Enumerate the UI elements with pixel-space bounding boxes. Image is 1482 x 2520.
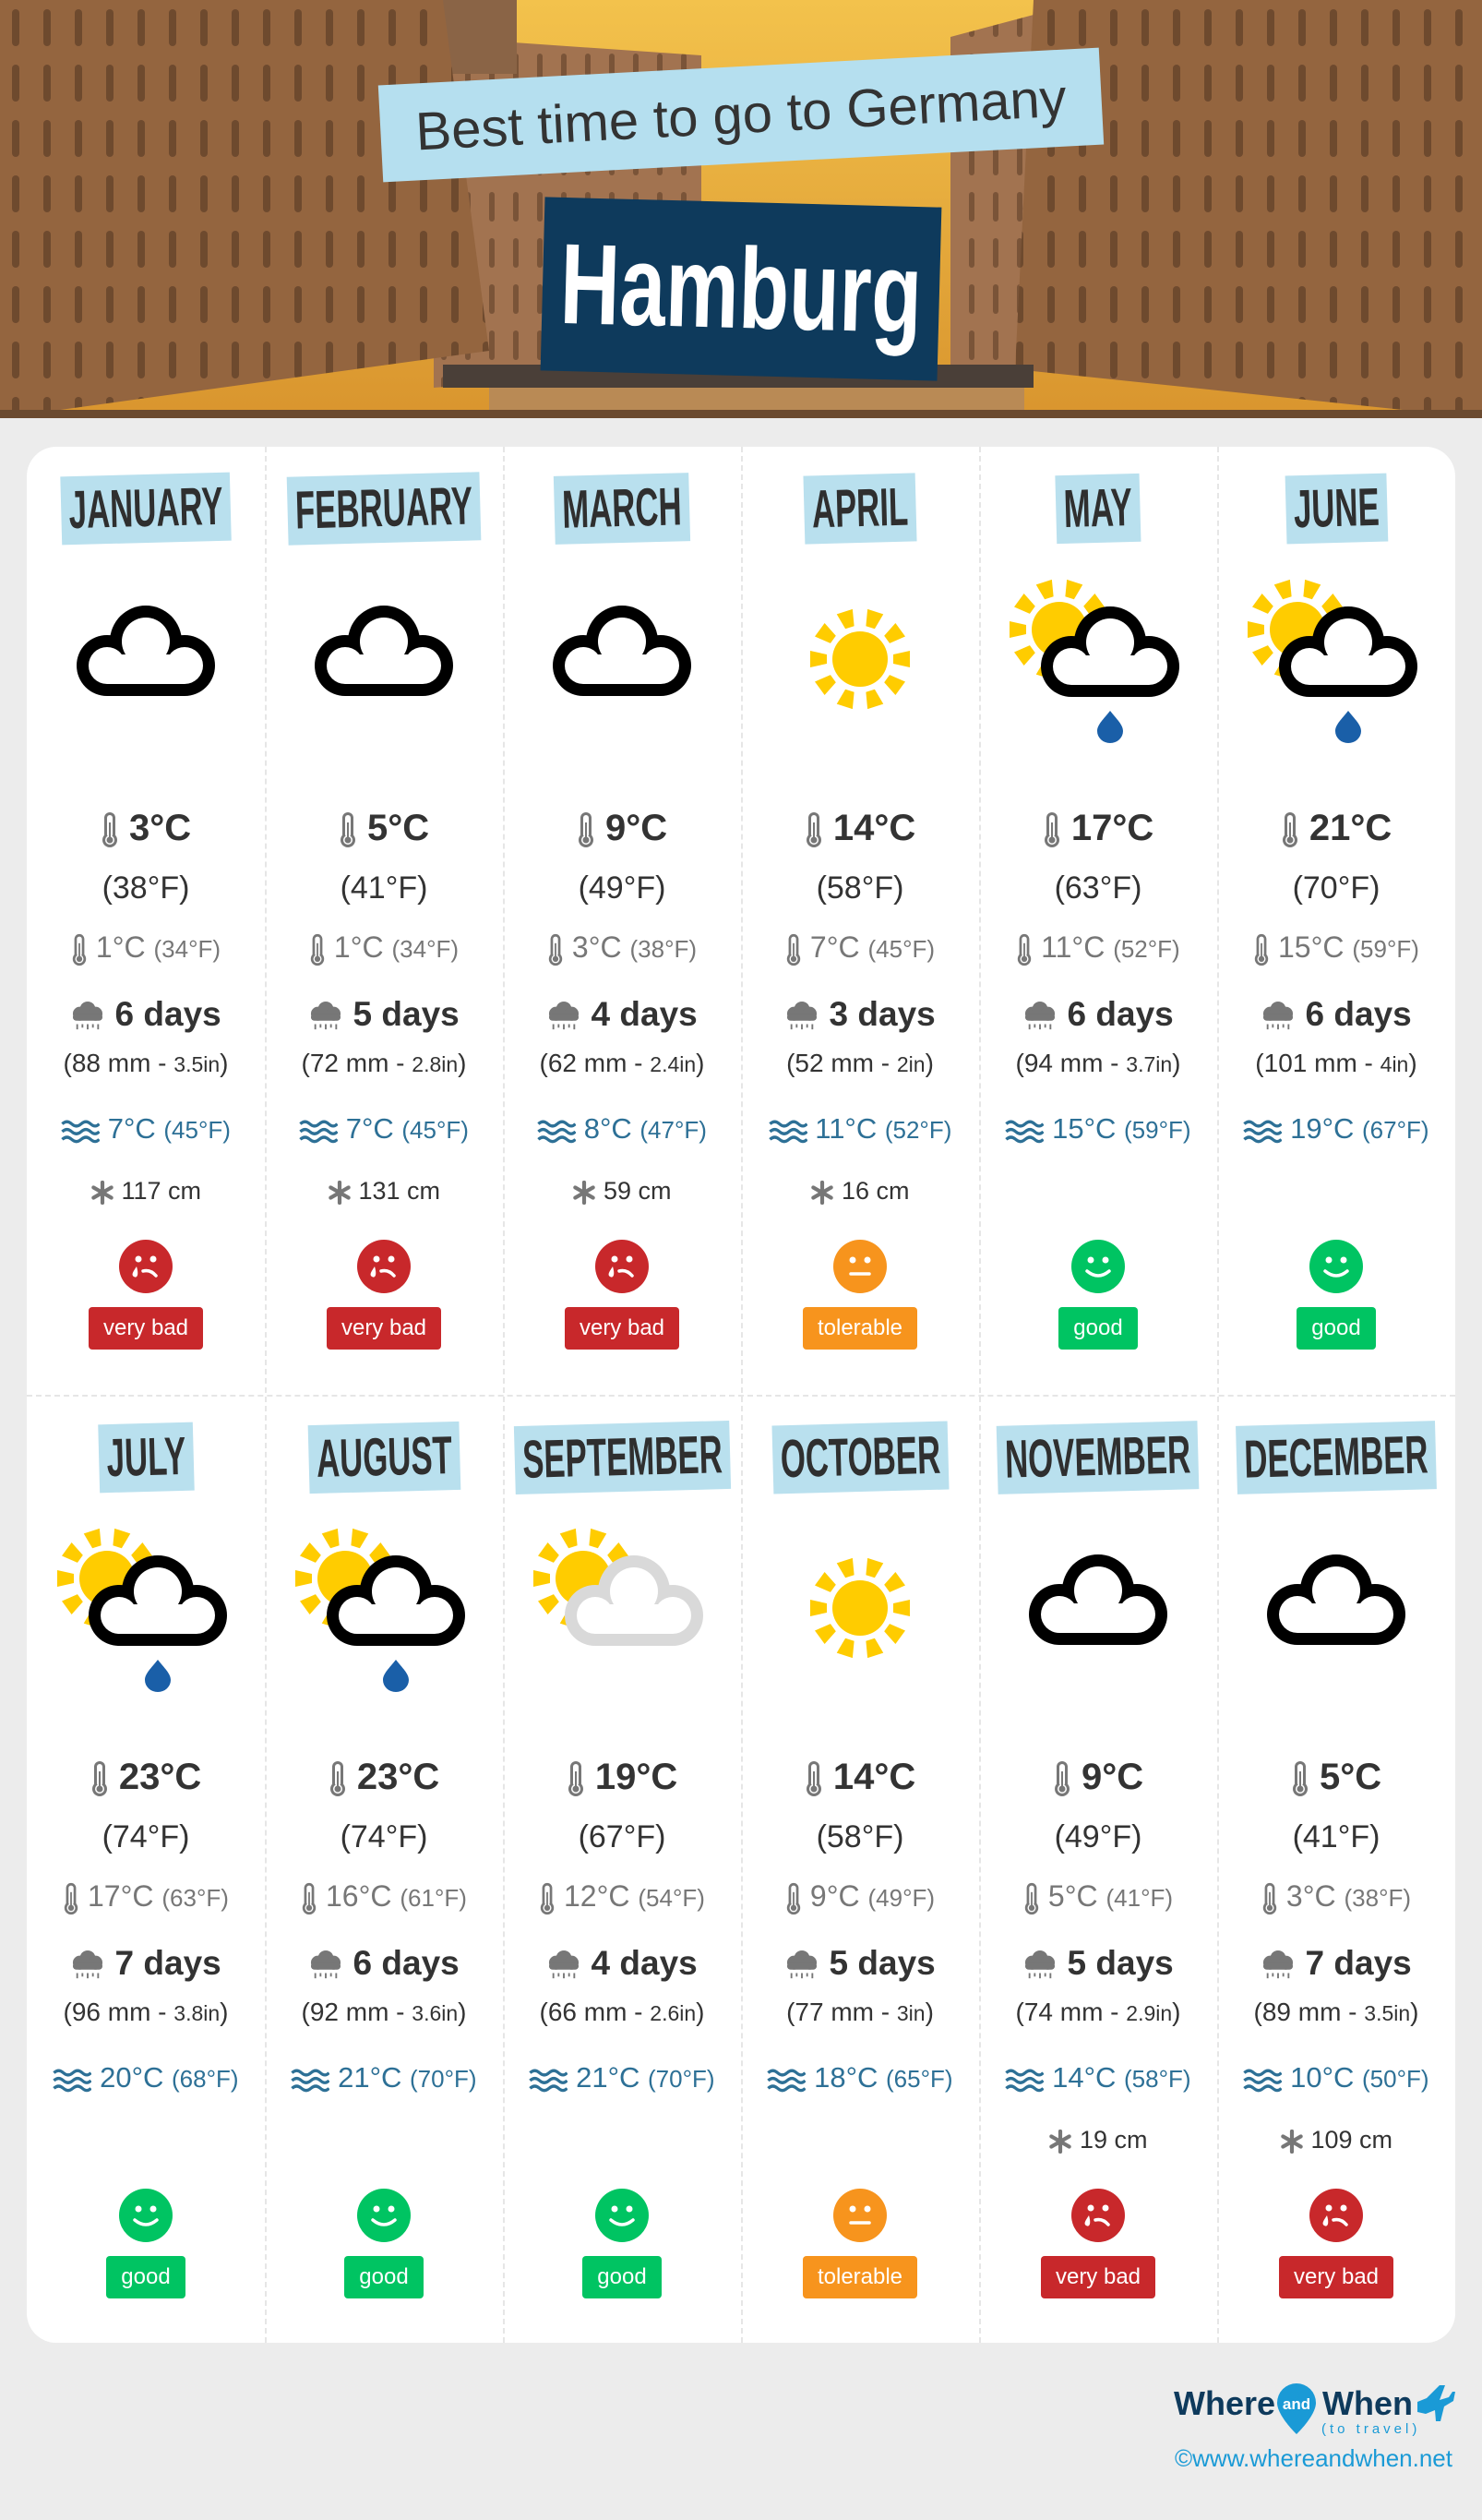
panel: September	[503, 1396, 741, 2343]
rain days: 7 days	[1306, 1944, 1412, 1982]
rain days	[979, 1940, 1217, 1986]
low temperature	[265, 1876, 503, 1916]
panel: March: (62 mm - 2.4in)	[539, 1049, 704, 1077]
sea temperature	[503, 2058, 741, 2098]
rating face	[1217, 2188, 1455, 2243]
sea temperature	[27, 2058, 265, 2098]
rating badge: very bad	[341, 1315, 426, 1340]
footer logo: Where and When: and	[1283, 2395, 1310, 2413]
sea temperature	[1217, 1109, 1455, 1149]
temperature: 5°C	[367, 808, 429, 848]
panel: November	[979, 1396, 1217, 2343]
rain days: 6 days	[353, 1944, 460, 1982]
footer logo: Where and When: (to travel)	[1321, 2421, 1420, 2437]
temperature: 19°C	[595, 1757, 677, 1797]
sea temperature: 21°C (70°F)	[576, 2061, 714, 2094]
footer logo: Where and When: Where	[1174, 2384, 1275, 2422]
rating face	[979, 2188, 1217, 2243]
snow	[573, 1177, 672, 1205]
panel: October: (77 mm - 3in)	[786, 1998, 934, 2026]
month label: APRIL	[811, 477, 909, 539]
rating face	[357, 1240, 411, 1293]
rating badge: good	[597, 2264, 647, 2289]
panel: October: (58°F)	[817, 1819, 903, 1854]
temperature: 5°C	[1320, 1757, 1381, 1797]
month label: JULY	[105, 1426, 186, 1488]
rating face	[265, 2188, 503, 2243]
low temperature	[979, 927, 1217, 967]
rating badge: very bad	[103, 1315, 188, 1340]
temperature: 23°C	[119, 1757, 201, 1797]
low temperature	[27, 1876, 265, 1916]
rating badge: tolerable	[818, 1315, 902, 1340]
sea temperature: 15°C (59°F)	[1052, 1112, 1190, 1145]
rating face	[741, 2188, 979, 2243]
snow: 131 cm	[358, 1177, 440, 1205]
low temperature	[1217, 1876, 1455, 1916]
rain days	[503, 1940, 741, 1986]
rating badge: good	[1073, 1315, 1123, 1340]
low temperature: 7°C (45°F)	[810, 930, 935, 964]
icon: cloud	[1217, 1516, 1455, 1700]
header photo: Hamburg warehouse district	[0, 0, 1482, 418]
main card panel	[27, 447, 1455, 2343]
month label: OCTOBER	[779, 1425, 941, 1489]
low temperature: 12°C (54°F)	[564, 1879, 705, 1913]
temperature	[341, 808, 429, 848]
low temperature: 1°C (34°F)	[334, 930, 459, 964]
month label: SEPTEMBER	[521, 1424, 723, 1490]
rating face	[503, 2188, 741, 2243]
panel: January: (38°F)	[102, 870, 189, 906]
sea temperature: 11°C (52°F)	[815, 1112, 951, 1145]
temperature: 23°C	[357, 1757, 439, 1797]
low temperature: 11°C (52°F)	[1041, 930, 1180, 964]
panel: May: (94 mm - 3.7in)	[1015, 1049, 1180, 1077]
rain days: 5 days	[353, 995, 460, 1033]
title banner: Best time to go to Germany	[378, 48, 1104, 182]
temperature: 9°C	[1082, 1757, 1143, 1797]
low temperature: 1°C (34°F)	[96, 930, 221, 964]
rain days	[979, 991, 1217, 1038]
month label: DECEMBER	[1244, 1424, 1428, 1490]
rain days	[27, 1940, 265, 1986]
month label: JUNE	[1293, 477, 1380, 539]
icon: cloud	[77, 606, 215, 696]
rating face	[833, 1240, 887, 1293]
low temperature: 17°C (63°F)	[88, 1879, 229, 1913]
panel: December: (41°F)	[1293, 1819, 1380, 1854]
icon: cloud	[315, 606, 453, 696]
sea temperature: 20°C (68°F)	[100, 2061, 238, 2094]
temperature	[503, 1754, 741, 1800]
panel: February	[286, 472, 482, 1350]
rating face	[27, 2188, 265, 2243]
rain days: 3 days	[830, 995, 936, 1033]
rain days	[1217, 991, 1455, 1038]
month label: MAY	[1063, 477, 1133, 539]
rain days: 4 days	[592, 995, 698, 1033]
low temperature: 3°C (38°F)	[572, 930, 697, 964]
panel: August	[265, 1396, 503, 2343]
rain days	[1217, 1940, 1455, 1986]
temperature: 9°C	[605, 808, 667, 848]
panel: December: (89 mm - 3.5in)	[1253, 1998, 1418, 2026]
panel: May: (63°F)	[1055, 870, 1141, 906]
rating badge: very bad	[1294, 2264, 1379, 2289]
low temperature: 16°C (61°F)	[326, 1879, 467, 1913]
icon: sun with rain cloud	[979, 567, 1217, 751]
panel: August: (74°F)	[341, 1819, 427, 1854]
city name: Hamburg	[541, 197, 941, 381]
panel: April: (52 mm - 2in)	[786, 1049, 934, 1077]
panel: February: (72 mm - 2.8in)	[301, 1049, 466, 1077]
rain days: 6 days	[1306, 995, 1412, 1033]
sea temperature: 7°C (45°F)	[346, 1112, 469, 1145]
rating face	[119, 1240, 173, 1293]
panel: November: (49°F)	[1055, 1819, 1141, 1854]
snow: 16 cm	[842, 1177, 910, 1205]
footer logo: Where and When: When	[1322, 2384, 1413, 2422]
sea temperature: 7°C (45°F)	[108, 1112, 231, 1145]
sea temperature: 21°C (70°F)	[338, 2061, 476, 2094]
panel: May	[979, 447, 1217, 1394]
low temperature: 3°C (38°F)	[1286, 1879, 1411, 1913]
snow: 117 cm	[121, 1177, 201, 1205]
rating face	[595, 1240, 649, 1293]
panel: January: (88 mm - 3.5in)	[63, 1049, 228, 1077]
temperature: 21°C	[1309, 808, 1392, 848]
temperature	[979, 805, 1217, 851]
snow: 19 cm	[1080, 2126, 1148, 2154]
panel: April: (58°F)	[817, 870, 903, 906]
temperature	[265, 1754, 503, 1800]
month label: FEBRUARY	[294, 475, 473, 541]
title banner: Best time to go to Germany: Best time to go to Germany	[414, 68, 1068, 162]
panel: March: (49°F)	[579, 870, 665, 906]
month label: JANUARY	[68, 476, 223, 540]
rain days: 4 days	[592, 1944, 698, 1982]
temperature	[1217, 805, 1455, 851]
footer url: ©www.whereandwhen.net	[1175, 2444, 1452, 2472]
rain days: 6 days	[115, 995, 221, 1033]
snow: 109 cm	[1310, 2126, 1392, 2154]
sea temperature: 18°C (65°F)	[814, 2061, 952, 2094]
panel: September: (67°F)	[579, 1819, 665, 1854]
snow: 59 cm	[604, 1177, 672, 1205]
low temperature	[1217, 927, 1455, 967]
low temperature: 9°C (49°F)	[810, 1879, 935, 1913]
temperature: 14°C	[833, 808, 915, 848]
panel: August: (92 mm - 3.6in)	[301, 1998, 466, 2026]
rain days: 5 days	[830, 1944, 936, 1982]
month label: NOVEMBER	[1005, 1424, 1191, 1490]
panel: January	[60, 473, 232, 1350]
month label: AUGUST	[316, 1425, 452, 1489]
snow	[979, 2121, 1217, 2158]
low temperature	[741, 1876, 979, 1916]
rating badge: very bad	[1056, 2264, 1141, 2289]
icon: sun with light cloud	[503, 1516, 741, 1700]
icon: sun with rain cloud	[1217, 567, 1455, 751]
sea temperature	[979, 1109, 1217, 1149]
temperature	[102, 808, 191, 848]
rating face	[979, 1239, 1217, 1294]
sea temperature	[265, 2058, 503, 2098]
temperature	[27, 1754, 265, 1800]
rating face	[1217, 1239, 1455, 1294]
icon: sun	[741, 1516, 979, 1700]
icon: sun with rain cloud	[27, 1516, 265, 1700]
snow	[811, 1177, 910, 1205]
rating badge: good	[1311, 1315, 1361, 1340]
panel: July: (96 mm - 3.8in)	[63, 1998, 228, 2026]
panel: November: (74 mm - 2.9in)	[1015, 1998, 1180, 2026]
rating badge: very bad	[580, 1315, 664, 1340]
sea temperature: 19°C (67°F)	[1290, 1112, 1428, 1145]
panel: April	[769, 473, 951, 1350]
sea temperature: 10°C (50°F)	[1290, 2061, 1428, 2094]
sea temperature: 14°C (58°F)	[1052, 2061, 1190, 2094]
rating badge: tolerable	[818, 2264, 902, 2289]
rating badge: good	[121, 2264, 171, 2289]
low temperature	[979, 1876, 1217, 1916]
temperature	[1217, 1754, 1455, 1800]
panel: September: (66 mm - 2.6in)	[539, 1998, 704, 2026]
rain days: 6 days	[1068, 995, 1174, 1033]
panel: July: (74°F)	[102, 1819, 189, 1854]
temperature	[741, 1754, 979, 1800]
icon: sun with rain cloud	[265, 1516, 503, 1700]
temperature: 3°C	[129, 808, 191, 848]
low temperature: 15°C (59°F)	[1278, 930, 1419, 964]
low temperature: 5°C (41°F)	[1048, 1879, 1173, 1913]
panel: June	[1217, 447, 1455, 1394]
panel: June: (70°F)	[1293, 870, 1380, 906]
rating badge: good	[359, 2264, 409, 2289]
temperature	[979, 1754, 1217, 1800]
panel: February: (41°F)	[341, 870, 427, 906]
icon: sun	[810, 609, 910, 709]
panel: October	[741, 1396, 979, 2343]
temperature	[579, 808, 667, 848]
rain days	[265, 1940, 503, 1986]
rain days: 7 days	[115, 1944, 221, 1982]
panel: March	[537, 473, 707, 1350]
panel: December	[1217, 1396, 1455, 2343]
month label: MARCH	[561, 476, 683, 540]
icon: cloud	[979, 1516, 1217, 1700]
sea temperature	[741, 2058, 979, 2098]
temperature: 17°C	[1071, 808, 1153, 848]
sea temperature	[979, 2058, 1217, 2098]
rain days: 5 days	[1068, 1944, 1174, 1982]
panel: June: (101 mm - 4in)	[1255, 1049, 1417, 1077]
sea temperature: 8°C (47°F)	[584, 1112, 707, 1145]
low temperature	[503, 1876, 741, 1916]
icon: cloud	[553, 606, 691, 696]
rain days	[741, 1940, 979, 1986]
panel: July	[27, 1396, 265, 2343]
footer logo: Where and When	[1163, 2372, 1458, 2446]
city name: Hamburg: Hamburg	[558, 221, 924, 357]
snow	[1217, 2121, 1455, 2158]
temperature: 14°C	[833, 1757, 915, 1797]
sea temperature	[1217, 2058, 1455, 2098]
